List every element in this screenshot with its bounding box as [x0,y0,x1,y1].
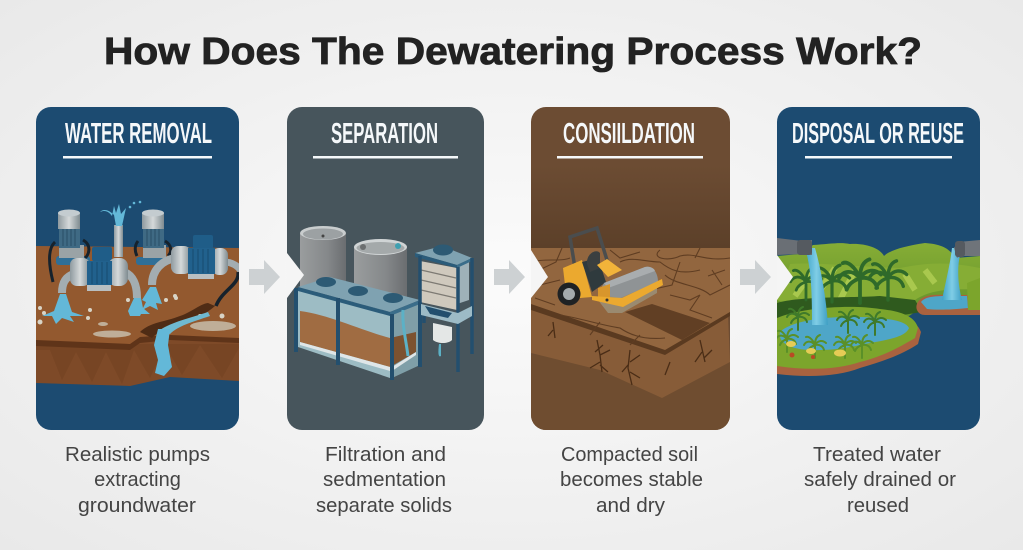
horizontal pump 2 [152,235,241,306]
illustration: reuse landscape [776,238,980,376]
notch [531,250,548,298]
arrow 1 [249,260,280,294]
dark foliage [777,296,918,318]
horizontal pump 1 [62,247,137,298]
pipes [777,238,980,258]
caption: water removal: Realistic pumps [65,444,210,466]
caption: separation: Filtration and [325,444,446,466]
title: How Does The Dewatering Process Work? [104,31,922,73]
heading: consolidation: CONSIILDATION [563,118,695,150]
heading: separation: SEPARATION [331,118,438,150]
settling tank [296,277,420,380]
caption: consolidation [560,444,703,517]
caption: consolidation: and dry [596,495,665,517]
caption: disposal or reuse: reused [847,495,909,517]
caption: separation [316,444,452,517]
caption: water removal [65,444,210,517]
water jets [42,287,162,324]
tanks [300,226,407,305]
subsurface roots [548,322,712,385]
caption: water removal: groundwater [78,495,196,517]
riser pipe and fountain [100,201,141,257]
caption: separation: sedmentation [323,469,446,491]
drainage waterfall [160,312,210,334]
puddles [93,321,236,338]
panel: water removal [36,107,241,430]
debris [38,294,224,324]
filter tower [415,244,472,372]
left island [777,326,921,376]
notch [777,255,793,300]
panel: consolidation [531,107,730,430]
caption: water removal: extracting [94,469,181,491]
arrow 3 [740,260,771,294]
caption: disposal or reuse: Treated water [813,444,941,466]
palms [787,307,886,335]
illustration: pumps extracting groundwater [36,201,241,386]
surface cracks [531,248,730,345]
notch [287,253,304,298]
vertical pump right [135,210,171,265]
caption: disposal or reuse [804,444,956,517]
roller [558,228,663,313]
caption: disposal or reuse: safely drained or [804,469,956,491]
fruits [786,341,846,356]
hills [777,243,980,322]
panel: disposal or reuse [776,107,980,430]
caption: consolidation: Compacted soil [561,444,698,466]
caption: consolidation: becomes stable [560,469,703,491]
caption: separation: separate solids [316,495,452,517]
illustration: compacted soil and roller [531,207,730,430]
arrow 2 [494,260,525,294]
heading: water removal: WATER REMOVAL [65,118,212,150]
illustration: filtration and sedimentation [296,226,472,380]
vertical pump left [49,210,90,282]
right pond [916,295,980,315]
waterfalls [805,248,828,325]
panel: separation [287,107,484,430]
